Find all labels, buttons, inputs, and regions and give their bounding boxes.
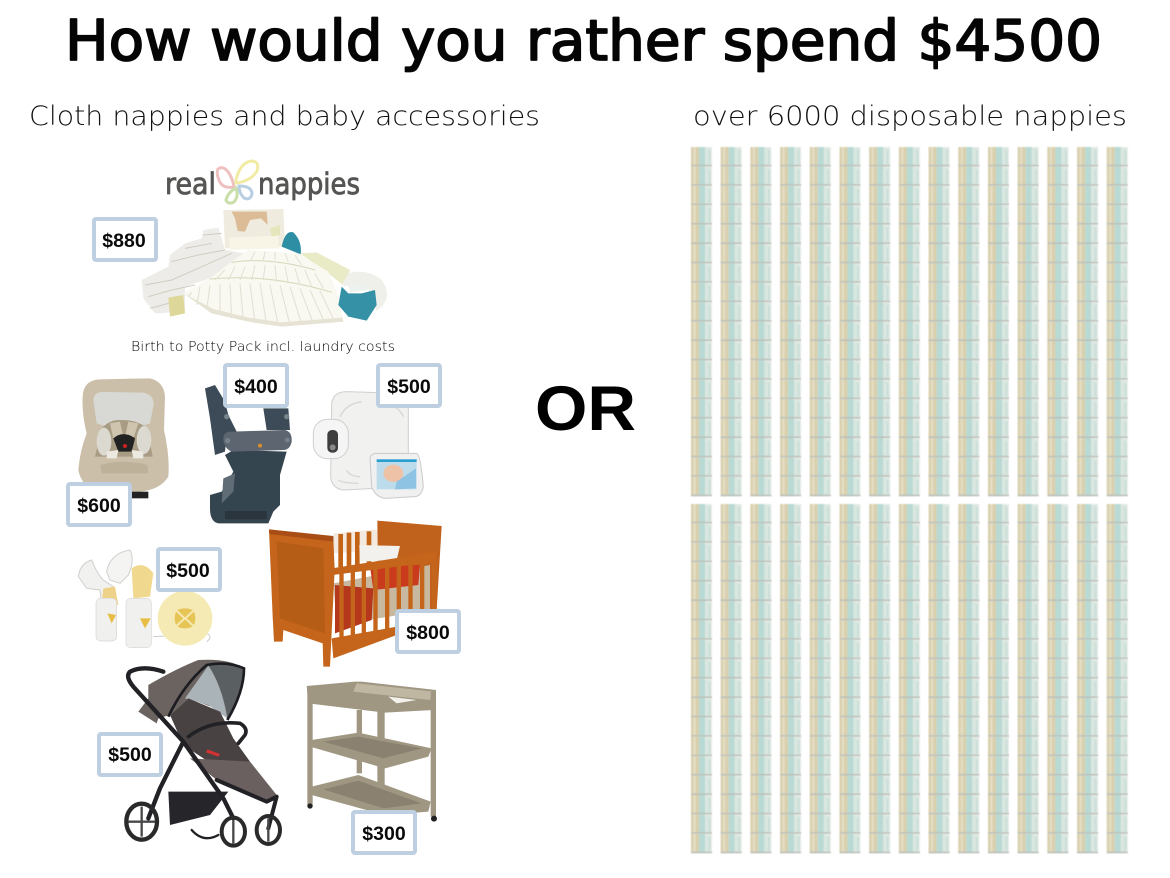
caption: birth to potty pack: Birth to Potty Pack incl. laundry costs	[131, 339, 395, 355]
image: change table	[307, 682, 437, 822]
price tag: $500 monitor	[378, 365, 440, 406]
frame	[128, 668, 277, 838]
price tag: $500 pump	[158, 549, 220, 590]
white cover	[342, 272, 387, 311]
price tag: $600: $600	[77, 495, 121, 517]
fan seams	[188, 252, 335, 326]
teal wrap	[282, 232, 301, 254]
canopy	[138, 660, 244, 723]
basket	[168, 792, 228, 825]
image: birth to potty pack	[142, 209, 387, 327]
logo: real nappies	[165, 161, 360, 203]
box	[223, 209, 285, 250]
price tag: $500 pump: $500	[166, 560, 210, 582]
image: breast pump	[78, 550, 212, 648]
price tag: $800	[397, 611, 459, 652]
price tag: $500 stroller: $500	[108, 744, 152, 766]
image: baby carrier	[205, 385, 292, 523]
price tag: $800: $800	[406, 622, 450, 644]
price tag: $400: $400	[234, 376, 278, 398]
nappy stacks: top block	[691, 147, 1128, 496]
logo: real nappies: real	[165, 167, 216, 201]
green packets	[300, 252, 350, 287]
image: car seat	[78, 378, 169, 498]
left folded nappies	[142, 228, 245, 313]
price tag: $600	[68, 484, 130, 525]
tag	[168, 295, 185, 317]
heading: disposable nappies: over 6000 disposable nappies	[693, 101, 1127, 132]
price tag: $300	[353, 812, 415, 853]
price tag: $300: $300	[362, 823, 406, 845]
image: wooden cot	[269, 521, 442, 667]
heading: cloth nappies: Cloth nappies and baby accessories	[29, 101, 540, 132]
price tag: $400	[225, 365, 287, 406]
white fan	[183, 250, 343, 327]
price tag: $880	[94, 219, 156, 260]
price tag: $500 stroller	[99, 734, 161, 775]
image: stroller	[126, 660, 280, 846]
seat back	[170, 698, 250, 765]
logo: real nappies: nappies	[258, 167, 360, 201]
nappy stacks: bottom block	[691, 504, 1128, 853]
title: How would you rather spend $4500	[65, 9, 1102, 74]
OR label: OR	[535, 374, 636, 444]
teal cover	[338, 287, 377, 321]
seat	[190, 758, 277, 802]
price tag: $500 monitor: $500	[387, 376, 431, 398]
price tag: $880: $880	[102, 230, 146, 252]
wheels	[126, 804, 280, 846]
image: angelcare monitor	[313, 392, 423, 498]
